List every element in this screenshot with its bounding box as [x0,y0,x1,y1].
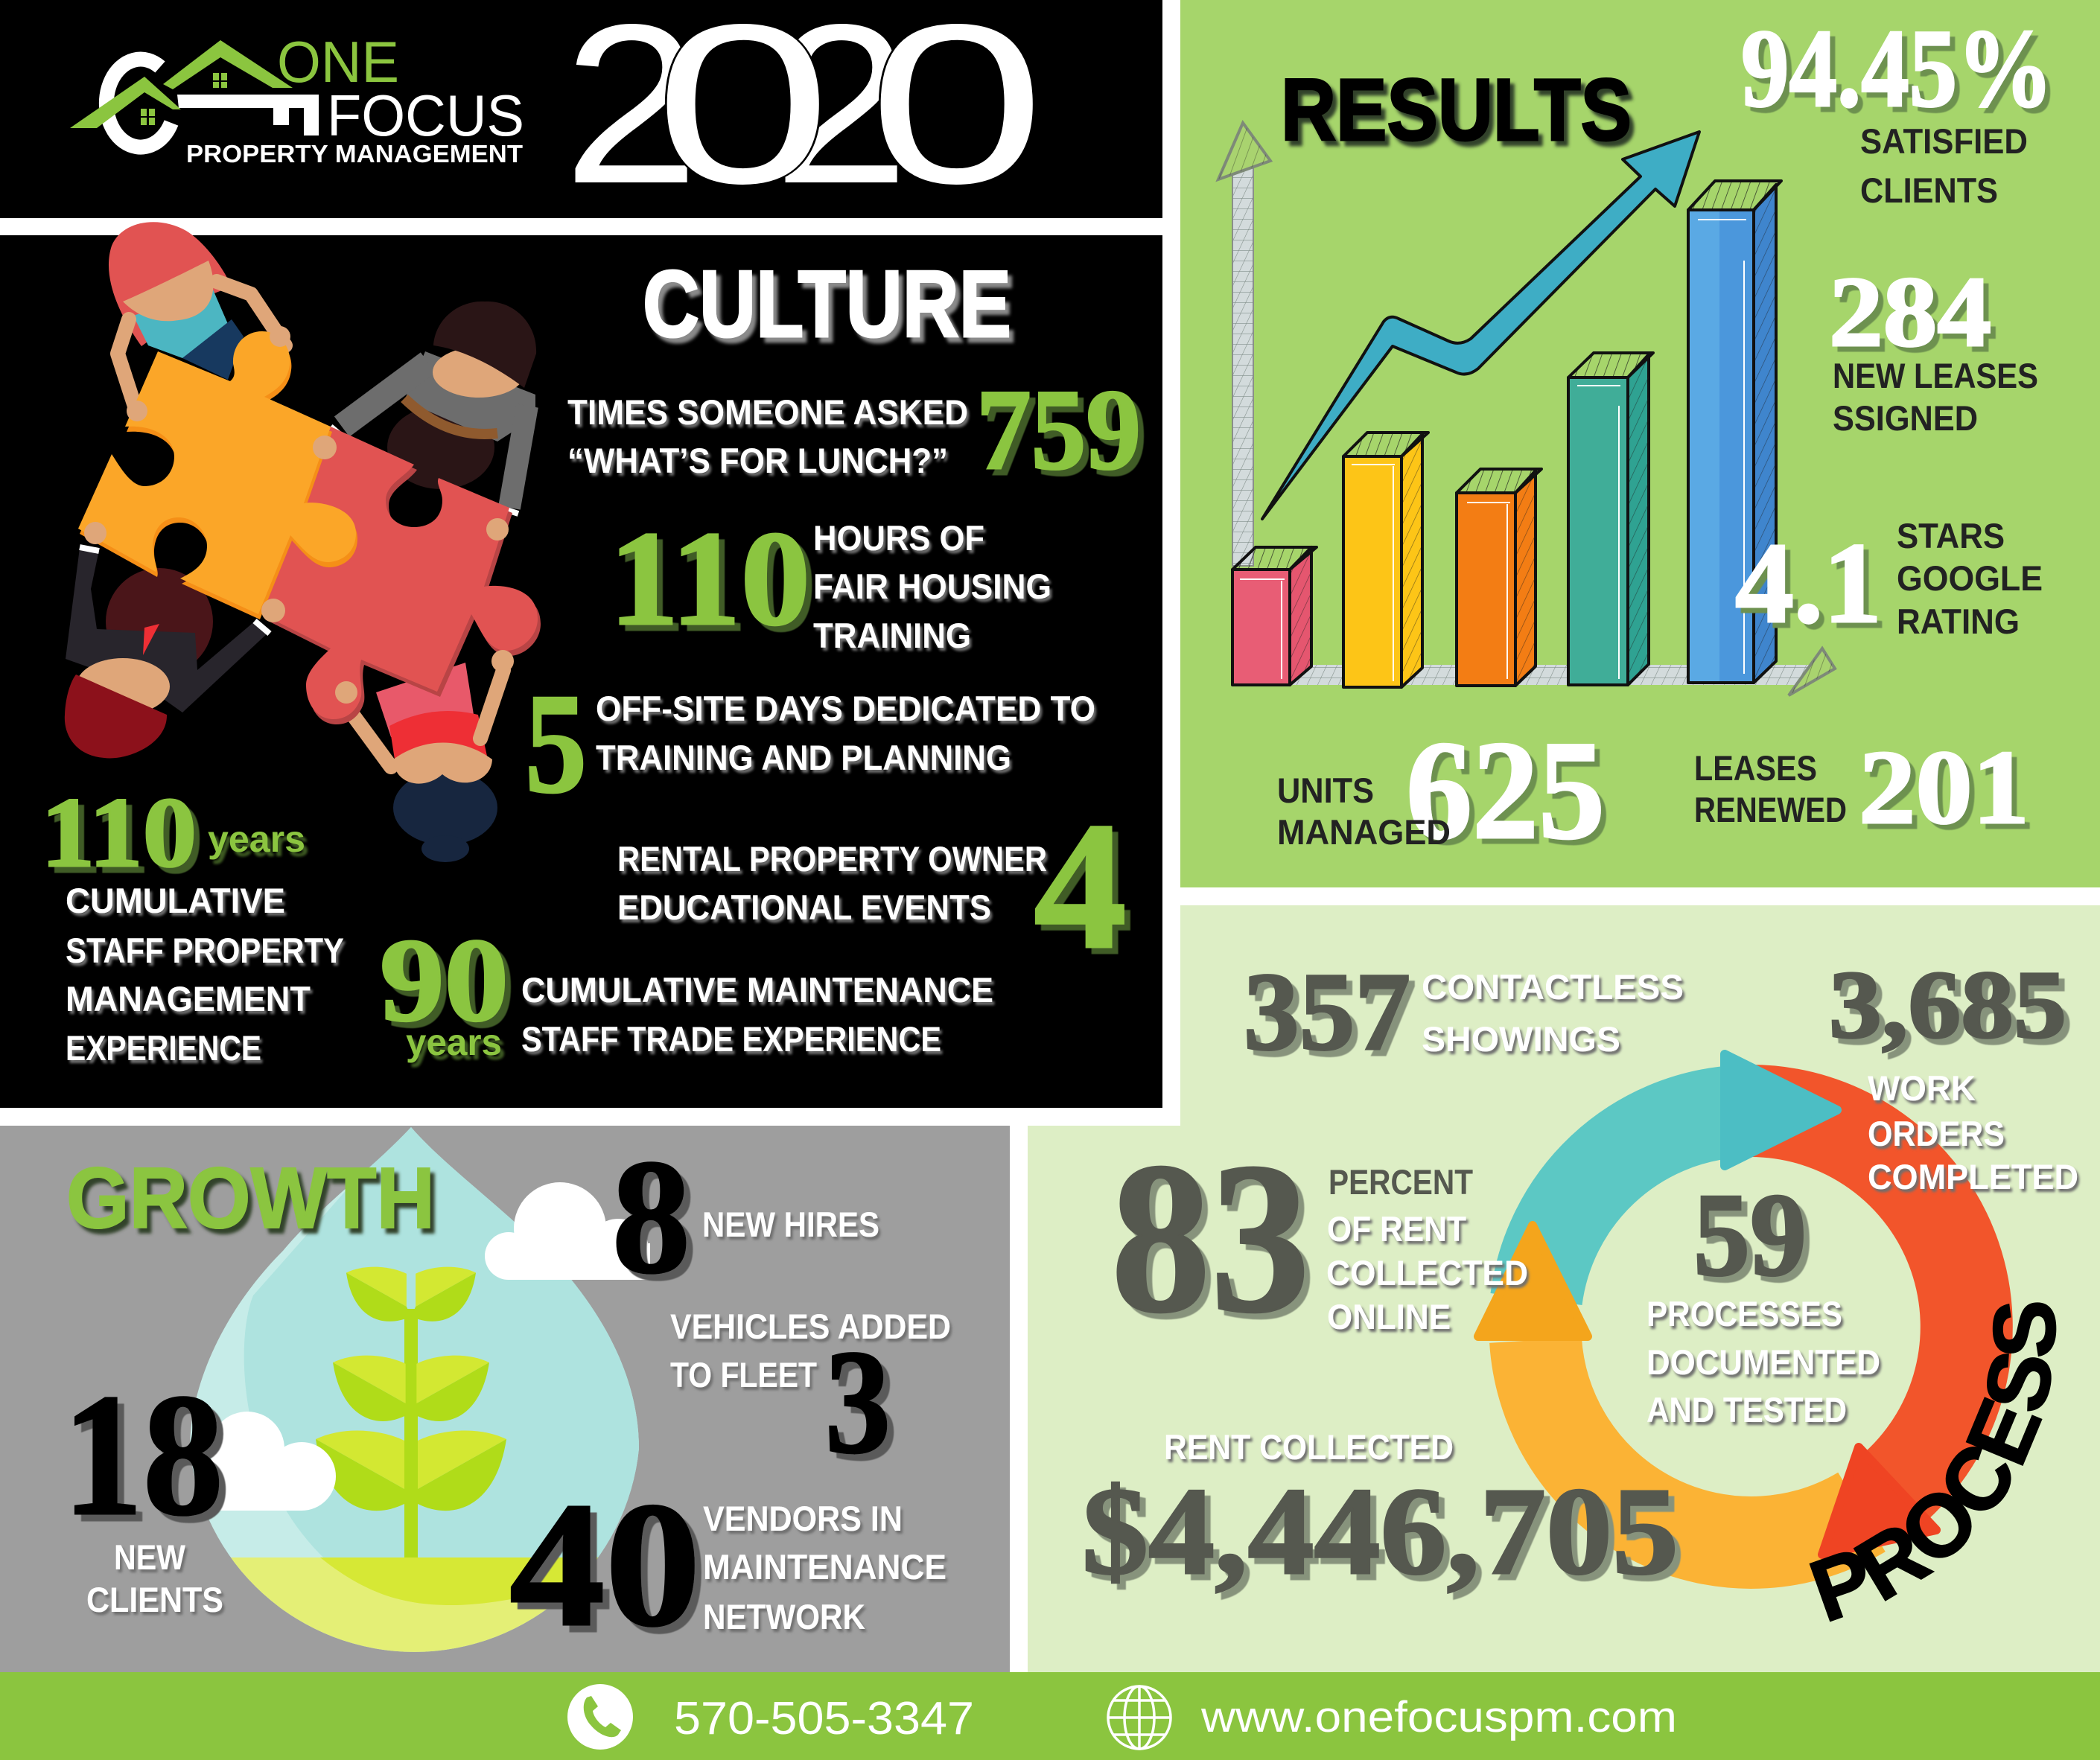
stat: maintenance experience: STAFF TRADE EXPERIENCE [521,1019,941,1059]
stat: new leases: 284 [1829,257,1991,368]
logo: One Focus Property Management: FOCUS [327,83,524,148]
stat: staff experience: CUMULATIVE [66,881,285,920]
icon: phone [567,1684,633,1750]
icon: globe [1108,1686,1171,1749]
stat: off-site days [525,664,1095,823]
stat: maintenance experience: years [406,1021,502,1063]
stat: satisfied clients: 94.45% [1741,7,2053,130]
person: pink shirt [342,663,503,862]
stat: staff experience: MANAGEMENT [66,979,311,1018]
stat: vehicles added [670,1307,951,1485]
stat: new clients [63,1358,223,1619]
ground [231,1557,598,1652]
stat: google rating: 4.1 [1735,519,1882,647]
heading: results: RESULTS [1281,61,1632,159]
illustration: team with puzzle [65,222,541,862]
stat: contactless showings [1244,950,1684,1074]
stat: fair housing: TRAINING [813,616,971,655]
stat: educational events [617,785,1127,986]
puzzle: orange piece [78,331,357,619]
stat: vendors: 40 [509,1465,701,1663]
stat: new hires [612,1126,879,1307]
stat: rent collected online: ONLINE [1327,1297,1451,1336]
stat: new leases [1829,257,2038,438]
stat: rent collected online [1111,1118,1528,1357]
stat: lunch: “WHAT’S FOR LUNCH?” [567,441,948,480]
stat: rent collected online: OF RENT [1327,1209,1466,1249]
heading: process: PROCESS [1810,1302,2057,1622]
logo: One Focus Property Management: PROPERTY MANAGEMENT [186,140,523,168]
stat: vehicles added: TO FLEET [670,1355,817,1394]
stat: fair housing: FAIR HOUSING [813,567,1051,606]
drop [190,1127,639,1652]
stat: processes documented: DOCUMENTED [1646,1342,1880,1382]
stat: rent collected online: PERCENT [1329,1162,1473,1202]
stat: staff experience: years [208,818,305,860]
stat: rent collected online: COLLECTED [1326,1253,1528,1292]
logo: One Focus Property Management [70,29,524,168]
icon: upper cloud [485,1182,650,1280]
panel: process [1028,905,2100,1672]
stat: fair housing: HOURS OF [813,518,984,558]
stat: work orders: ORDERS [1868,1114,2005,1153]
leaves [316,1267,506,1511]
stat: contactless showings: 357 [1244,950,1410,1074]
panel: culture [0,235,1162,1108]
stat: contactless showings: SHOWINGS [1422,1019,1620,1059]
stat: educational events: EDUCATIONAL EVENTS [617,887,991,927]
stat: work orders: COMPLETED [1868,1157,2078,1196]
stat: new clients: CLIENTS [86,1580,223,1619]
stat: work orders: WORK [1868,1068,1976,1108]
stat: units managed: UNITS [1277,771,1374,810]
stat: satisfied clients [1741,7,2053,210]
stat: units managed [1277,712,1605,869]
heading: culture: CULTURE [643,251,1011,357]
chart: process ring [1478,1054,1967,1555]
stat: new clients: 18 [63,1358,223,1552]
drop inner shade [244,1127,639,1557]
bar: orange [1457,469,1541,686]
panel: growth [0,1126,1010,1672]
stat: leases renewed: RENEWED [1694,790,1847,829]
axis: floor arrow [1292,648,1835,695]
stat: vendors [509,1465,946,1663]
chart: results bars [1218,123,1835,695]
stat: staff experience: EXPERIENCE [66,1028,261,1068]
person: red hair [109,222,285,413]
arrow: trend [1262,132,1699,519]
stat: new leases: NEW LEASES [1833,356,2038,395]
stat: staff experience: 110 [41,777,197,887]
stat: work orders [1829,951,2078,1196]
stat: educational events: 4 [1034,785,1127,986]
stat: staff experience [41,777,344,1068]
stat: google rating: RATING [1897,602,2020,641]
stat: vehicles added: VEHICLES ADDED [670,1307,951,1346]
stat: maintenance experience: CUMULATIVE MAINTENANCE [521,970,993,1010]
stat: new clients: NEW [114,1537,186,1577]
footer phone number: 570-505-3347 [674,1693,974,1744]
title: 2020 [563,0,1045,231]
stat: processes documented: 59 [1693,1168,1807,1301]
stem [404,1309,418,1557]
stat: lunch: 759 [976,366,1141,494]
stat: contactless showings: CONTACTLESS [1422,967,1684,1007]
stat: maintenance experience [380,914,993,1063]
stat: new hires: 8 [612,1126,690,1307]
hands [84,326,514,704]
stat: leases renewed: LEASES [1694,748,1817,788]
person: black suit [65,547,270,758]
stat: off-site days: TRAINING AND PLANNING [596,738,1011,777]
person: gray shirt [331,302,536,514]
icon: lower cloud [201,1412,336,1511]
stat: leases renewed: 201 [1859,728,2029,846]
axis: vertical arrow [1218,123,1270,566]
stat: off-site days: 5 [525,664,587,823]
illustration: water drop with plant [190,1127,639,1652]
stat: processes documented: PROCESSES [1646,1294,1842,1333]
stat: rent collected online: 83 [1111,1118,1310,1357]
stat: fair housing: 110 [609,504,810,654]
stat: rent collected: RENT COLLECTED [1164,1427,1454,1467]
stat: vendors: VENDORS IN [703,1499,903,1538]
stat: processes documented [1646,1168,1880,1429]
footer website: www.onefocuspm.com [1200,1693,1677,1741]
stat: google rating: GOOGLE [1897,558,2043,598]
stat: rent collected: $4,446,705 [1082,1462,1679,1601]
stat: satisfied clients: CLIENTS [1860,170,1998,210]
stat: lunch [567,366,1141,494]
stat: satisfied clients: SATISFIED [1860,121,2028,161]
bar: yellow [1343,433,1428,687]
stat: google rating: STARS [1897,516,2005,555]
stat: units managed: MANAGED [1277,812,1451,852]
stat: new hires: NEW HIRES [702,1205,879,1244]
puzzle: red piece [262,427,541,724]
stat: off-site days: OFF-SITE DAYS DEDICATED TO [596,689,1095,728]
stat: google rating [1735,516,2043,647]
stat: maintenance experience: 90 [380,914,509,1046]
panel: footer [0,1672,2100,1760]
stat: fair housing [609,504,1051,655]
stat: new leases: SSIGNED [1833,398,1978,438]
stat: vendors: NETWORK [703,1597,865,1636]
bar: teal [1568,353,1653,685]
stat: leases renewed [1694,728,2029,846]
bar: red [1232,547,1317,685]
stat: work orders: 3,685 [1829,951,2066,1059]
stat: educational events: RENTAL PROPERTY OWNER [617,839,1047,879]
stat: vendors: MAINTENANCE [703,1547,946,1587]
stat: lunch: TIMES SOMEONE ASKED [567,392,968,432]
stat: processes documented: AND TESTED [1646,1390,1847,1429]
heading: growth: GROWTH [66,1150,435,1246]
stat: vehicles added: 3 [825,1320,891,1485]
stat: staff experience: STAFF PROPERTY [66,931,344,970]
logo: One Focus Property Management: ONE [277,29,399,95]
stat: units managed: 625 [1406,712,1605,869]
bar: blue [1688,181,1781,683]
panel: results [1180,0,2100,887]
panel: header [0,0,1162,218]
